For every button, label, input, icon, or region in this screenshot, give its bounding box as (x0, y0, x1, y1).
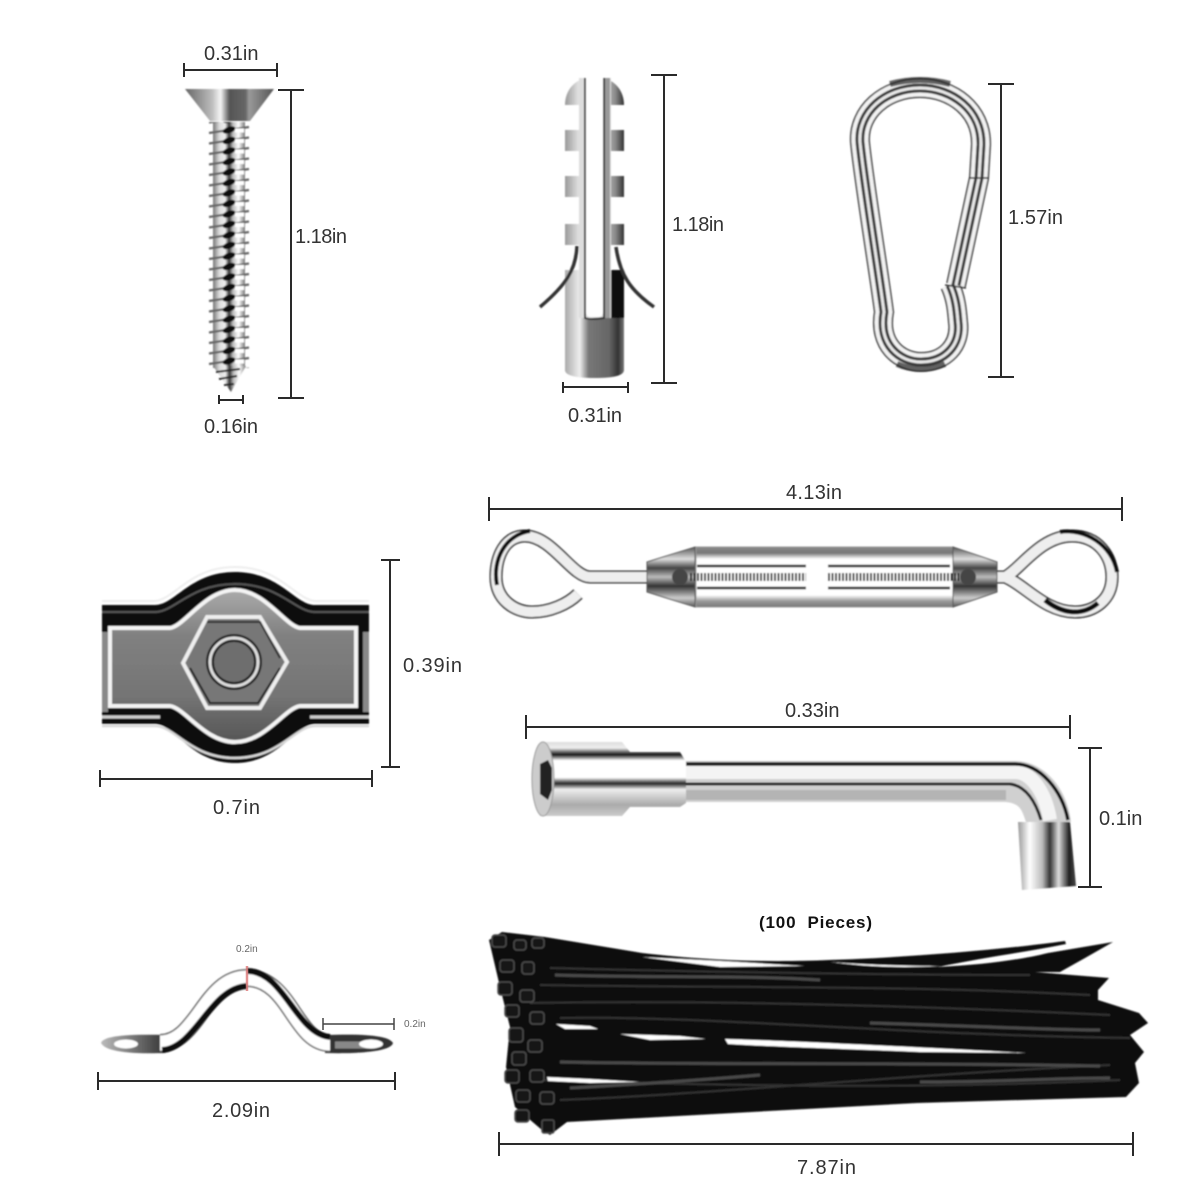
icon: clip artwork (102, 567, 369, 763)
dimension: pad eye length: 2.09in (212, 1100, 270, 1122)
dimension: wrench height (1078, 748, 1142, 887)
dimension: clip height: 0.39in (403, 655, 462, 677)
dimension: top width: 0.2in (236, 944, 258, 955)
icon: turnbuckle artwork (496, 531, 1117, 612)
white gaps between ties (547, 957, 1027, 1083)
dimension: anchor length: 1.18in (672, 214, 724, 236)
dimension: clip width: 0.7in (213, 797, 260, 819)
dimension: head width (184, 43, 277, 77)
dimension: side width (323, 1018, 426, 1030)
dimension: clip height (381, 560, 462, 767)
item: wall anchor (540, 75, 724, 427)
item: carabiner (860, 80, 1063, 377)
label: quantity: (100 Pieces) (759, 913, 872, 932)
dimension: side width: 0.2in (404, 1019, 426, 1030)
dimension: anchor width: 0.31in (568, 405, 622, 427)
dimension: tip width: 0.16in (204, 416, 258, 438)
item: cable ties (489, 913, 1148, 1179)
icon: screw artwork (185, 89, 274, 392)
dimension: top width (236, 944, 258, 991)
dimension: carabiner length (988, 84, 1063, 377)
dimension: pad eye length (98, 1072, 395, 1122)
tie heads (492, 935, 554, 1133)
item: wire rope clip (100, 560, 462, 819)
dimension: tip width (204, 395, 258, 438)
dimension: clip width (100, 770, 372, 819)
dimension: wrench width (526, 700, 1070, 739)
icon: wrench artwork (532, 742, 1076, 890)
dimension: wrench width: 0.33in (785, 700, 840, 722)
dimension: tie length (499, 1132, 1133, 1179)
dimension: turnbuckle length (489, 482, 1122, 521)
icon: anchor artwork (540, 78, 654, 378)
dimension: head width: 0.31in (204, 43, 258, 65)
dimension: turnbuckle length: 4.13in (786, 482, 842, 504)
dimension: anchor length (651, 75, 724, 383)
dimension: anchor width (563, 382, 628, 427)
dimension: carabiner length: 1.57in (1008, 207, 1063, 229)
icon: bundle of cable ties (489, 932, 1148, 1135)
icon: carabiner artwork (860, 80, 989, 369)
item: wood screw (184, 43, 347, 438)
dimension: screw length: 1.18in (295, 226, 347, 248)
dimension: tie length: 7.87in (797, 1157, 856, 1179)
dimension: screw length (278, 90, 347, 398)
item: L wrench (526, 700, 1142, 890)
item: pad eye (98, 944, 426, 1122)
item: turnbuckle (489, 482, 1122, 612)
icon: pad eye artwork (101, 971, 393, 1053)
dimension: wrench height: 0.1in (1099, 808, 1142, 830)
